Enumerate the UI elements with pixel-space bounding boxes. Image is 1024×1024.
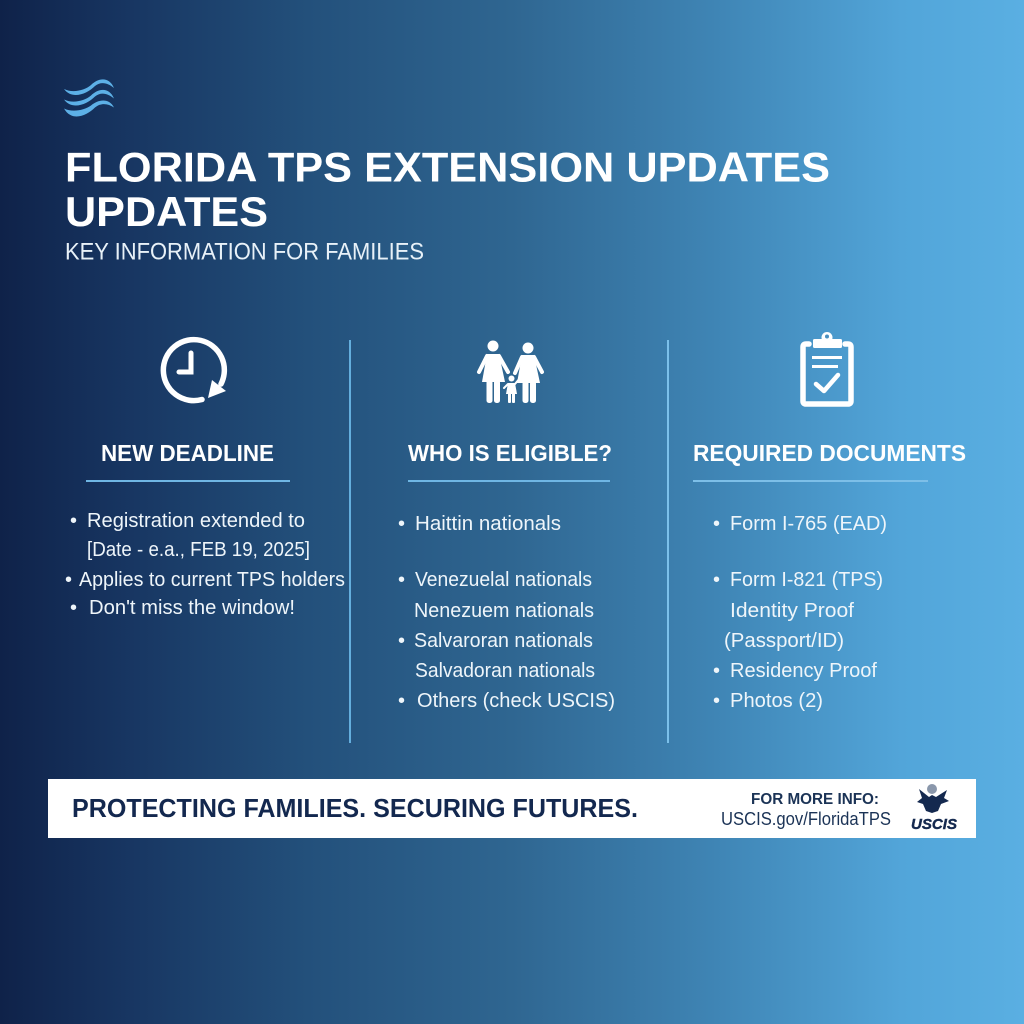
deadline list: • [65, 569, 72, 591]
subtitle: KEY INFORMATION FOR FAMILIES [65, 238, 424, 266]
documents list: • [713, 569, 720, 591]
heading: required documents: REQUIRED DOCUMENTS [693, 440, 966, 466]
title: UPDATES [65, 188, 268, 235]
heading: new deadline: NEW DEADLINE [101, 440, 274, 466]
eligibility list [398, 513, 615, 712]
eligibility list: • [398, 630, 405, 652]
documents list: Photos (2) [730, 690, 823, 712]
title: FLORIDA TPS EXTENSION UPDATES [65, 144, 830, 190]
more info [721, 791, 891, 829]
banner [48, 779, 976, 838]
icon: clock with arrow [163, 340, 226, 401]
eligibility list: • [398, 690, 405, 712]
USCIS logo [911, 784, 957, 833]
heading: who is eligible: WHO IS ELIGIBLE? [408, 440, 612, 466]
deadline list: Don't miss the window! [89, 597, 295, 619]
title [65, 144, 830, 235]
documents list: (Passport/ID) [724, 630, 844, 652]
eligibility list: Salvadoran nationals [415, 660, 595, 682]
more info: USCIS.gov/FloridaTPS [721, 809, 891, 829]
eligibility list: • [398, 569, 405, 591]
deadline list: Registration extended to [87, 510, 305, 532]
documents list [713, 513, 887, 712]
eligibility list: • [398, 513, 405, 535]
documents list: Identity Proof [730, 600, 854, 622]
panel: required documents [693, 332, 966, 712]
panel: who is eligible [398, 340, 615, 712]
documents list: Form I-765 (EAD) [730, 513, 887, 535]
divider [349, 340, 351, 743]
USCIS logo: USCIS [911, 816, 957, 833]
deadline list: • [70, 510, 77, 532]
deadline list: Applies to current TPS holders [79, 569, 345, 591]
eligibility list: Haittin nationals [415, 513, 561, 535]
documents list: • [713, 660, 720, 682]
documents list: Form I-821 (TPS) [730, 569, 883, 591]
deadline list: [Date - e.a., FEB 19, 2025] [87, 539, 310, 561]
tagline: PROTECTING FAMILIES. SECURING FUTURES. [72, 793, 638, 823]
deadline list: • [70, 597, 77, 619]
more info: FOR MORE INFO: [751, 791, 879, 808]
panel: new deadline [65, 340, 345, 619]
divider [667, 340, 669, 743]
eligibility list: Salvaroran nationals [414, 630, 593, 652]
documents list: • [713, 513, 720, 535]
icon: family [479, 340, 542, 403]
eligibility list: Venezuelal nationals [415, 569, 592, 591]
documents list: • [713, 690, 720, 712]
documents list: Residency Proof [730, 660, 877, 682]
eligibility list: Others (check USCIS) [417, 690, 615, 712]
eligibility list: Nenezuem nationals [414, 600, 594, 622]
deadline list [65, 510, 345, 619]
icon: clipboard [803, 332, 851, 404]
icon: waves logo [64, 79, 114, 117]
